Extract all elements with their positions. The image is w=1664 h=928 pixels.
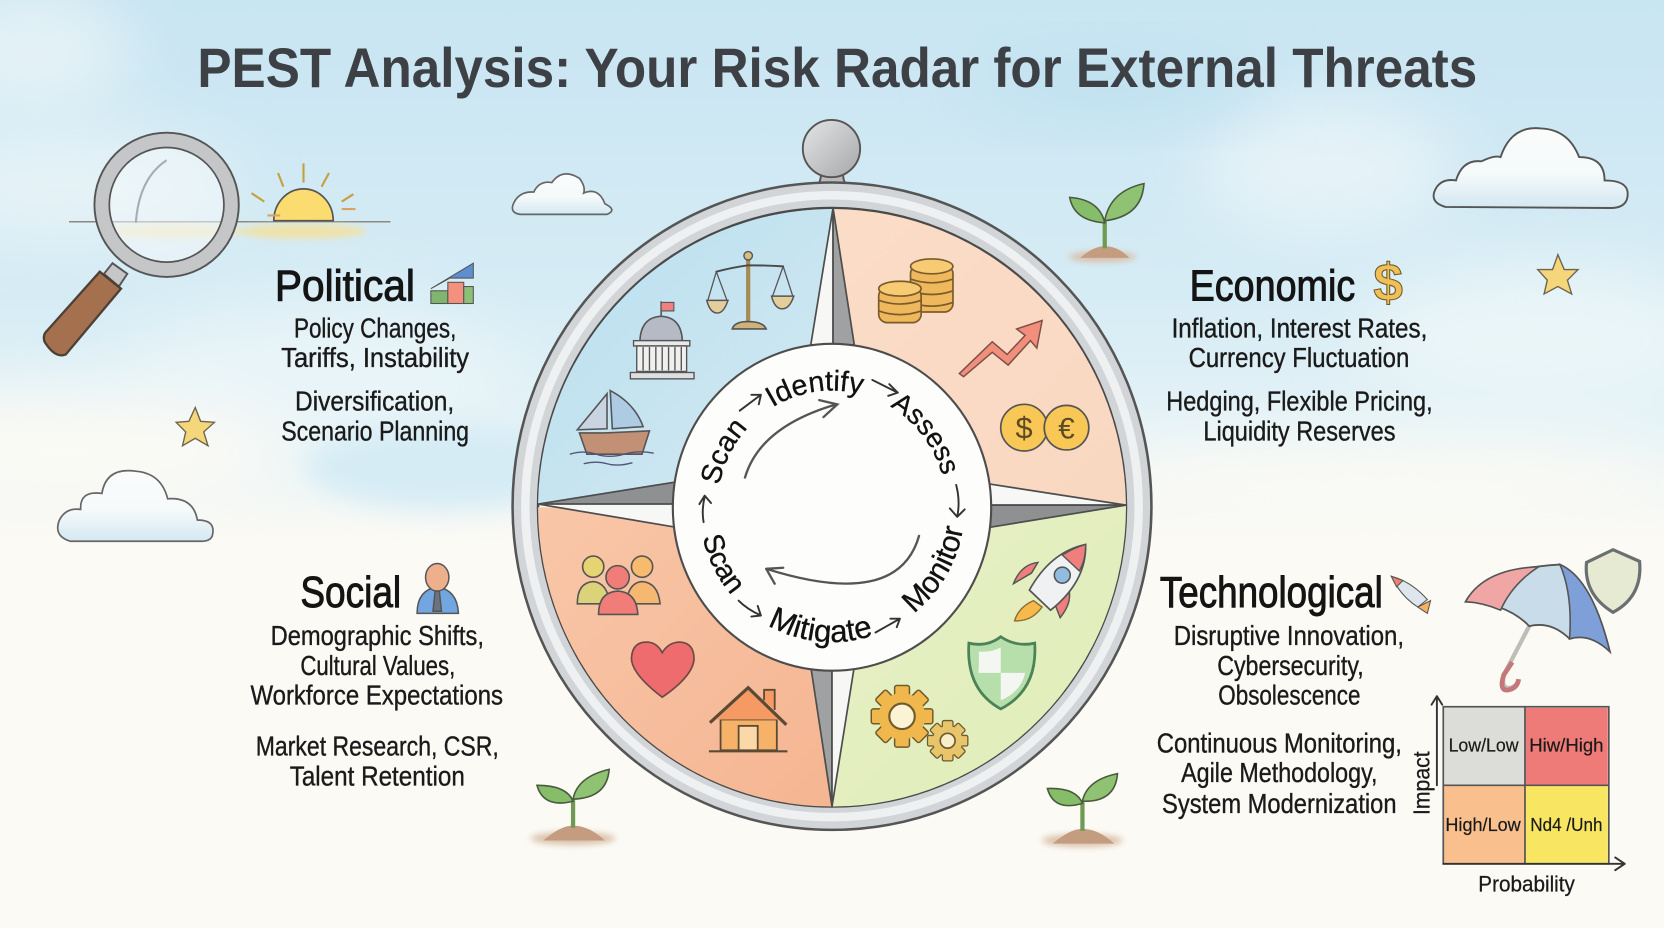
cycle arrow: Scan to Identify (740, 395, 761, 411)
axis label: Impact: Impact (1408, 751, 1434, 815)
icon: magnifying glass (44, 133, 391, 355)
icon: group of people (577, 556, 660, 614)
responses: Political: Scenario Planning (281, 415, 469, 446)
axis arrow: impact (1432, 696, 1442, 785)
icon: sailboat (570, 391, 654, 465)
icon: star right (1538, 255, 1578, 294)
risk radar wheel (511, 119, 1153, 832)
icon: heart (631, 642, 694, 697)
icon: sprout bottom right (1042, 774, 1123, 847)
icon: sprout bottom left (531, 769, 616, 845)
causes: Technological: Disruptive Innovation, (1174, 620, 1404, 651)
icon: small rocket (1391, 576, 1431, 613)
heading: Social: Social (300, 569, 401, 617)
icon: political blocks (431, 263, 473, 304)
responses: Political: Diversification, (295, 386, 454, 417)
heading: Political: Political (275, 262, 415, 310)
cycle label: Monitor: Monitor (901, 525, 962, 612)
compass star points (538, 208, 1126, 807)
icon: dollar sign: $ (1373, 253, 1403, 312)
matrix grid lines (1443, 707, 1609, 864)
causes: Political (281, 312, 469, 373)
causes: Technological (1174, 620, 1404, 711)
causes: Technological: Cybersecurity, (1217, 650, 1364, 681)
icon: cloud top centre (512, 174, 612, 214)
responses: Technological: System Modernization (1162, 788, 1397, 819)
icon: star left (176, 408, 214, 446)
icon: rising arrow (959, 320, 1042, 377)
centre hub (673, 344, 991, 671)
icon: rocket (1013, 544, 1086, 621)
responses: Economic: Hedging, Flexible Pricing, (1166, 386, 1433, 417)
causes: Social (250, 620, 503, 711)
axis arrow: probability (1443, 857, 1625, 870)
causes: Political: Policy Changes, (294, 312, 456, 343)
responses: Social: Talent Retention (290, 760, 465, 791)
outer ring (513, 183, 1151, 830)
icon: dollar and euro coins: € (1058, 412, 1075, 445)
responses: Technological: Continuous Monitoring, (1157, 727, 1402, 758)
matrix cell: yellow (1525, 785, 1608, 864)
heading: Technological: Technological (1160, 569, 1383, 617)
causes: Economic (1172, 312, 1427, 373)
responses: Economic: Liquidity Reserves (1203, 415, 1396, 446)
icon: dollar and euro coins (1001, 404, 1089, 451)
cycle arrow: Monitor from Mitigate (876, 619, 900, 632)
cycle arrow: Scan to Mitigate (739, 601, 761, 617)
title: PEST Analysis: Your Risk Radar for External Threats (197, 37, 1477, 99)
icon: dollar and euro coins: $ (1016, 410, 1033, 445)
panel: Political text (275, 262, 473, 446)
cycle label: Scan: Scan (702, 421, 747, 484)
causes: Social: Workforce Expectations (250, 680, 503, 711)
cell label: High/Low: High/Low (1445, 814, 1521, 835)
cycle arrow: Identify to Assess (872, 380, 898, 396)
matrix cell: High/Low (1443, 785, 1525, 864)
causes: Social: Demographic Shifts, (271, 620, 484, 651)
icon: cloud left (58, 471, 213, 541)
inner cycle arrow: bottom arc (766, 536, 919, 584)
axis label: Probability: Probability (1478, 871, 1576, 896)
inner cycle arrow: top arc (745, 400, 837, 478)
cycle label: Scan reversed: Scan (704, 534, 742, 594)
icon: capitol building (630, 301, 694, 379)
icon: umbrella with shield (1466, 550, 1640, 690)
cycle label: Assess: Assess (890, 395, 955, 474)
responses: Social: Market Research, CSR, (256, 731, 499, 762)
cell label: Low/Low: Low/Low (1449, 734, 1519, 755)
causes: Political: Tariffs, Instability (281, 342, 469, 373)
knob (803, 120, 860, 187)
causes: Economic: Currency Fluctuation (1189, 342, 1409, 373)
panel: economic quadrant (832, 209, 1126, 507)
icon: business person (417, 564, 458, 613)
responses: Economic (1166, 386, 1433, 446)
causes: Economic: Inflation, Interest Rates, (1172, 312, 1427, 343)
icon: balance scale (707, 252, 794, 329)
causes: Social: Cultural Values, (300, 650, 455, 681)
icon: coin stacks (879, 259, 953, 323)
responses: Social (256, 731, 499, 791)
cycle label: Identify: Identify (764, 370, 865, 406)
icon: house (709, 688, 787, 751)
cycle label: Mitigate: Mitigate (769, 606, 872, 648)
causes: Technological: Obsolescence (1218, 680, 1360, 711)
matrix cell: Low/Low (1443, 708, 1525, 785)
cycle arrow: Assess to Monitor (950, 485, 965, 517)
responses: Political (281, 386, 469, 446)
risk matrix chart (1408, 696, 1625, 896)
icon: sprout top right (1069, 184, 1144, 262)
panel: Economic text (1166, 253, 1433, 446)
panel: Social text (250, 564, 503, 791)
responses: Technological (1157, 727, 1402, 819)
heading: Economic: Economic (1190, 262, 1355, 310)
cell label: garbled yellow: Nd4 /Unh (1530, 814, 1602, 835)
icon: large gear (871, 686, 933, 747)
matrix cell: high/high (1525, 708, 1608, 785)
icon: green shield (969, 637, 1035, 709)
responses: Technological: Agile Methodology, (1181, 757, 1377, 788)
icon: cloud top right (1434, 128, 1628, 208)
icon: sun on horizon (239, 163, 366, 239)
cell label: Hiw/High: Hiw/High (1529, 734, 1604, 755)
panel: political quadrant (538, 209, 832, 507)
panel: technological quadrant (832, 505, 1126, 807)
panel: Technological text (1157, 569, 1431, 819)
cycle arrow: up to Scan (699, 496, 711, 522)
panel: social quadrant (538, 507, 832, 807)
icon: small gear (928, 721, 968, 761)
